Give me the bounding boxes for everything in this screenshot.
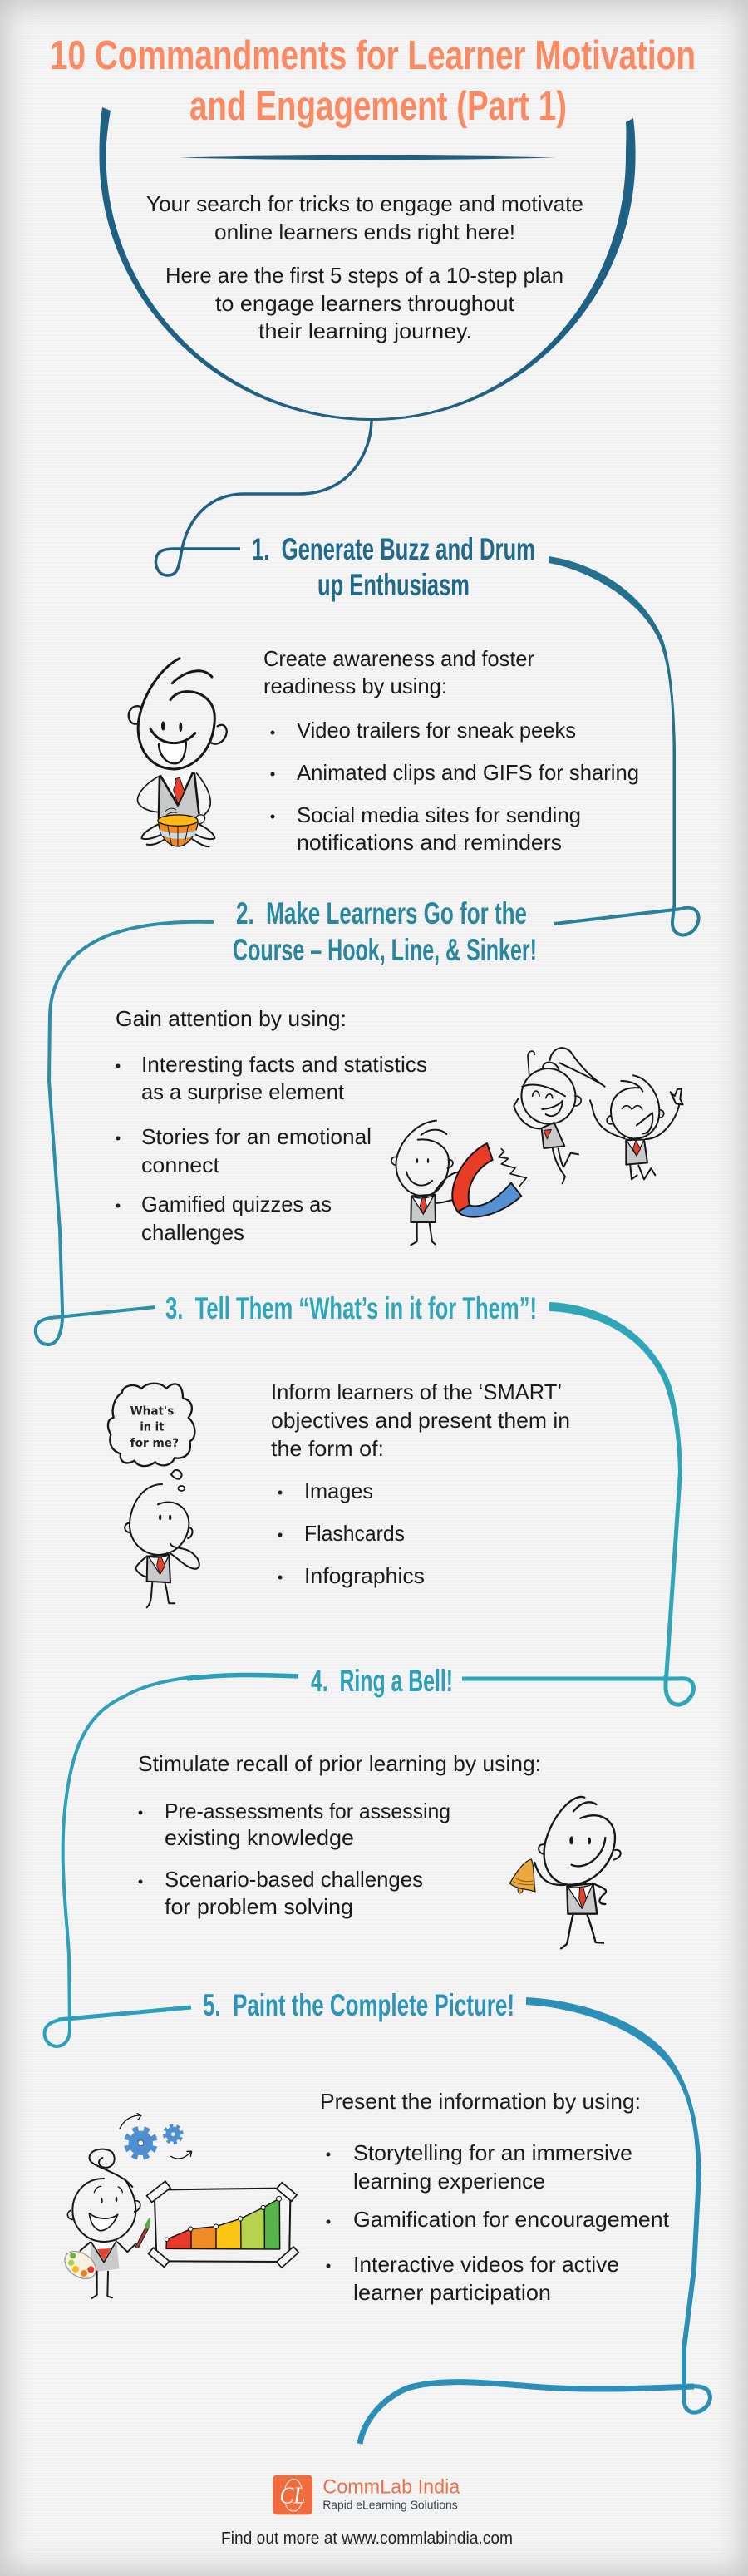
heading: step 4: 4. Ring a Bell! xyxy=(311,1664,453,1698)
callout: thought cloud: in it xyxy=(140,1421,165,1434)
text: step 2: Gamified quizzes as xyxy=(141,1192,332,1216)
text: step 1 xyxy=(263,646,639,855)
text: step 1: Create awareness and foster xyxy=(263,646,534,671)
callout: thought cloud: for me? xyxy=(130,1437,179,1450)
icon: man ringing bell xyxy=(509,1797,621,1948)
intro text: their learning journey. xyxy=(258,318,472,343)
divider under title xyxy=(180,155,556,160)
text: step 4: Scenario-based challenges xyxy=(165,1867,423,1892)
text: step 2: Interesting facts and statistics xyxy=(141,1052,427,1077)
connector from circle to step 1 xyxy=(156,419,372,575)
intro circle arc xyxy=(100,107,636,421)
heading: step 1 xyxy=(252,532,535,602)
title: and Engagement (Part 1) xyxy=(189,84,567,129)
text: step 1: readiness by using: xyxy=(263,674,447,698)
panel: step 5 xyxy=(60,1988,710,2444)
title xyxy=(50,33,696,129)
text: step 1: Animated clips and GIFS for sharing xyxy=(297,760,639,785)
intro text xyxy=(146,191,583,343)
arrow line: step 1 to step 2 xyxy=(549,556,698,935)
callout: thought cloud: What's xyxy=(130,1405,174,1419)
icon: bell xyxy=(509,1859,535,1893)
text: step 3: Infographics xyxy=(304,1563,425,1588)
panel: step 2 xyxy=(36,896,683,1345)
icon: man with magnet and jumping learners xyxy=(391,1048,683,1245)
text: step 5: learning experience xyxy=(353,2169,545,2194)
text: step 1: notifications and reminders xyxy=(297,830,562,855)
text: step 1: Video trailers for sneak peeks xyxy=(297,718,576,743)
text: step 5: Interactive videos for active xyxy=(353,2252,619,2277)
intro text: online learners ends right here! xyxy=(214,220,515,244)
text: step 2 xyxy=(116,1006,427,1245)
text: step 3: the form of: xyxy=(271,1436,384,1461)
arrow line: step 2 to step 3 xyxy=(36,922,214,1345)
text: step 4: for problem solving xyxy=(165,1894,353,1919)
icon: thinking man with cloud xyxy=(108,1384,199,1607)
text: step 3 xyxy=(271,1379,570,1588)
text: step 4: Pre-assessments for assessing xyxy=(165,1799,450,1823)
text: step 3: Flashcards xyxy=(304,1521,405,1546)
heading: step 1: up Enthusiasm xyxy=(317,568,470,602)
intro text: Here are the first 5 steps of a 10-step plan xyxy=(165,263,563,288)
heading: step 1: 1. Generate Buzz and Drum xyxy=(252,532,535,566)
arrow line: step 4 to step 5 xyxy=(45,1675,298,2046)
text: step 3: objectives and present them in xyxy=(271,1408,570,1433)
arrow line: step 5 to footer xyxy=(360,1997,710,2444)
text: step 5: learner participation xyxy=(353,2280,551,2305)
text: company name: CommLab India xyxy=(322,2475,460,2498)
icon: gears xyxy=(120,2114,192,2159)
text: step 2: Stories for an emotional xyxy=(141,1124,372,1149)
text: step 2: connect xyxy=(141,1152,220,1177)
icon: magnet xyxy=(452,1143,521,1217)
text: step 4 xyxy=(138,1751,541,1919)
arrow line: step 3 to step 4 xyxy=(462,1302,693,1705)
text: step 1: Social media sites for sending xyxy=(297,802,581,827)
intro text: to engage learners throughout xyxy=(215,291,515,316)
text: step 5: Gamification for encouragement xyxy=(353,2207,670,2232)
text: step 4: Stimulate recall of prior learning by using: xyxy=(138,1751,541,1776)
callout: thought cloud xyxy=(108,1384,194,1466)
heading: step 2: Course – Hook, Line, & Sinker! xyxy=(233,933,537,967)
icon: man with drum xyxy=(129,659,227,846)
text: step 2: challenges xyxy=(141,1220,244,1245)
text: step 2: Gain attention by using: xyxy=(116,1006,347,1031)
icon: painter with chart and gears xyxy=(60,2114,298,2298)
panel: step 3 xyxy=(108,1291,693,1705)
text: step 5 xyxy=(320,2089,670,2305)
text: step 2: as a surprise element xyxy=(141,1079,345,1104)
icon: CL logo square: CL xyxy=(280,2483,305,2509)
heading: step 3: 3. Tell Them “What’s in it for Them”! xyxy=(165,1291,537,1325)
text: tagline: Rapid eLearning Solutions xyxy=(322,2500,458,2513)
intro text: Your search for tricks to engage and motivate xyxy=(146,191,583,216)
footer link text: Find out more at www.commlabindia.com xyxy=(221,2529,513,2548)
text: step 3: Inform learners of the ‘SMART’ xyxy=(271,1379,562,1404)
panel: step 1 xyxy=(129,532,698,935)
text: step 5: Present the information by using: xyxy=(320,2089,641,2114)
icon: painter xyxy=(60,2149,150,2298)
panel: step 4 xyxy=(45,1664,621,2046)
heading: step 5: 5. Paint the Complete Picture! xyxy=(203,1988,514,2022)
footer logo xyxy=(273,2475,460,2514)
chart: rising area bars on taped board xyxy=(147,2181,298,2268)
text: step 5: Storytelling for an immersive xyxy=(353,2140,632,2165)
heading: step 2: 2. Make Learners Go for the xyxy=(236,896,527,930)
heading: step 2 xyxy=(233,896,537,967)
text: step 4: existing knowledge xyxy=(165,1825,354,1850)
icon: jumping boy xyxy=(590,1075,683,1179)
icon: CL logo square xyxy=(273,2475,312,2514)
icon: jumping girl xyxy=(514,1048,605,1183)
icon: man holding magnet xyxy=(391,1121,460,1245)
text: step 3: Images xyxy=(304,1478,373,1503)
